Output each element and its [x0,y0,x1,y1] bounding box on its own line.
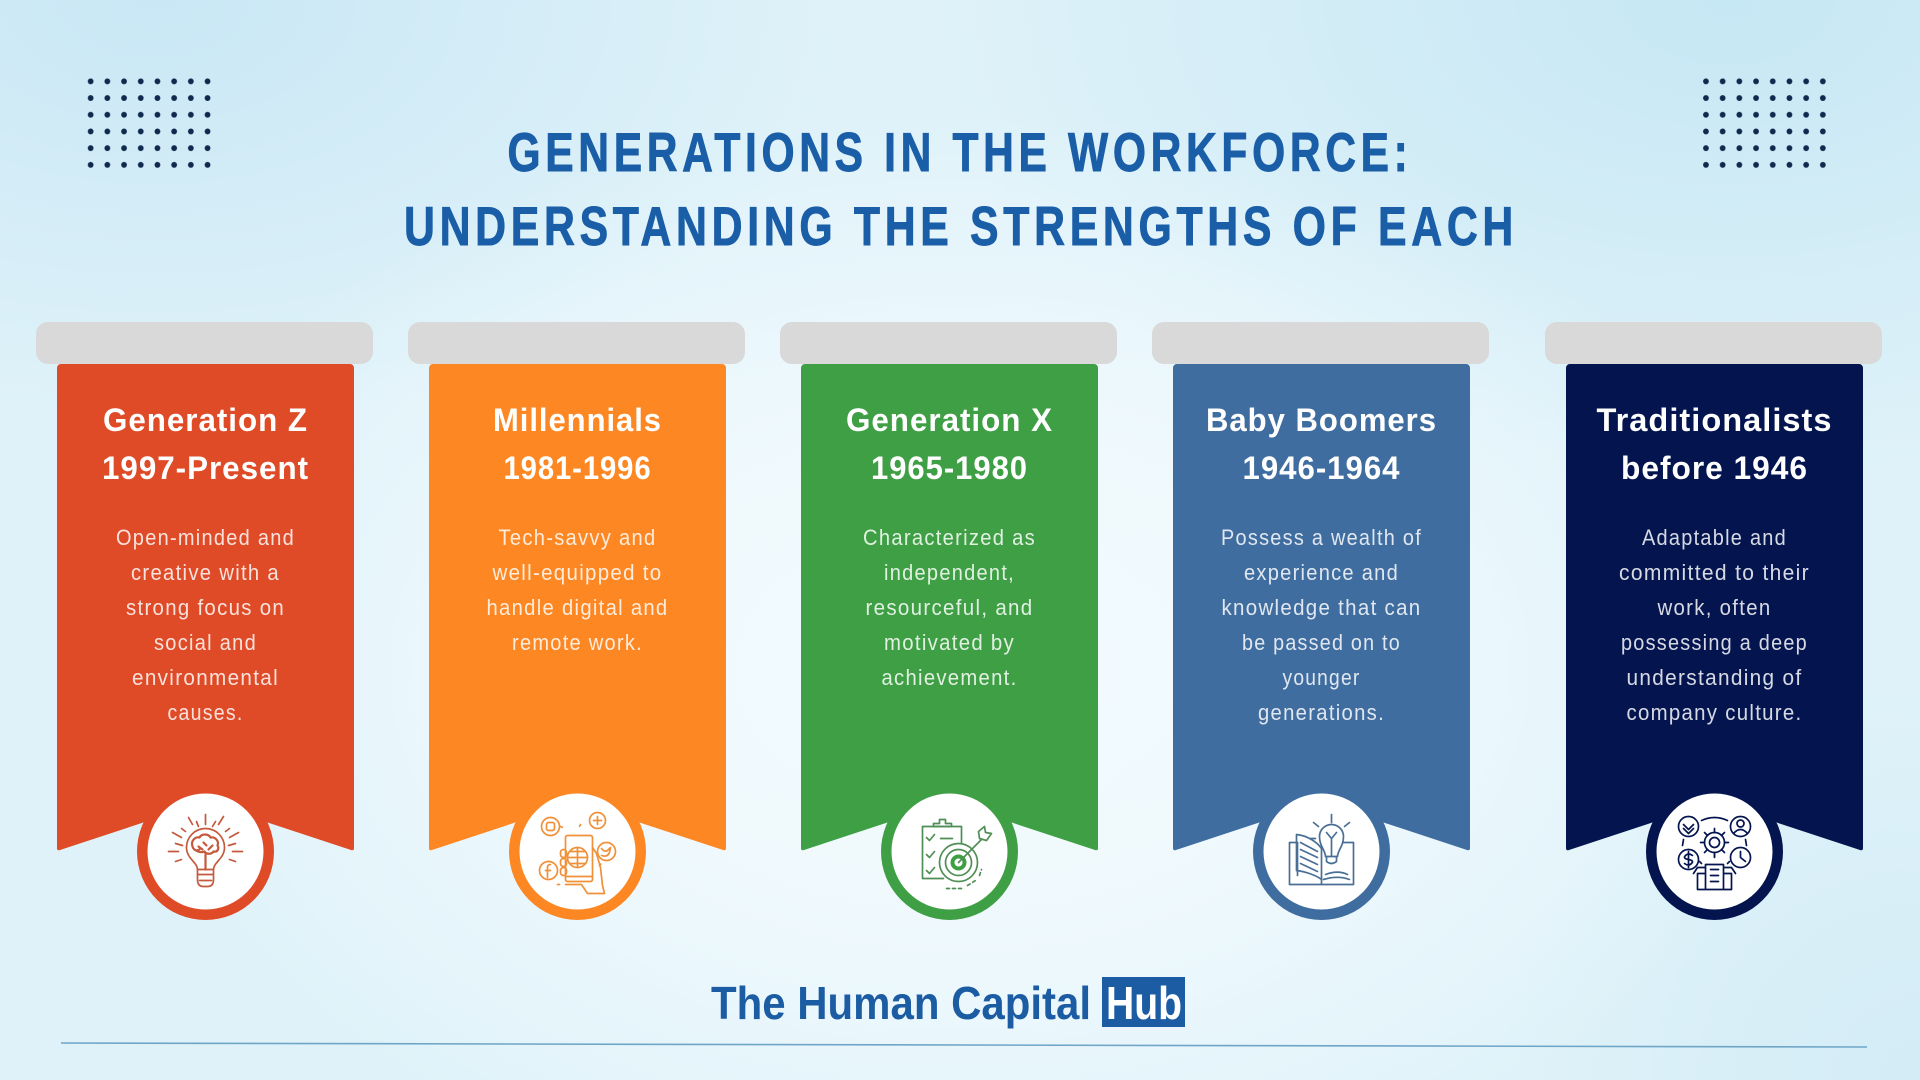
heading [493,402,662,486]
logo text: The Human Capital [711,977,1091,1029]
panel: Millennials [408,322,745,920]
heading: 1997-Present [102,450,309,486]
description: knowledge that can [1222,595,1422,620]
icon: company culture cycle [1678,816,1750,890]
description: company culture. [1626,700,1802,725]
icon circle [148,794,264,910]
panel: Traditionalists [1545,322,1882,920]
heading: Generation X [846,402,1053,438]
ribbon [1566,364,1863,850]
icon circle [1264,794,1380,910]
description: younger [1282,665,1360,690]
hanger bar [408,322,745,364]
title: GENERATIONS IN THE WORKFORCE: [508,121,1412,183]
heading [1596,402,1832,486]
description: be passed on to [1242,630,1401,655]
description: handle digital and [486,595,668,620]
icon circle [520,794,636,910]
icon: clipboard and target [922,820,992,888]
description: motivated by [884,630,1015,655]
icon: light bulb with brain [168,814,242,886]
panel: Generation X [780,322,1117,920]
description: work, often [1657,595,1772,620]
icon badge [509,783,646,920]
title [404,121,1518,257]
description: Possess a wealth of [1221,525,1422,550]
description: remote work. [512,630,643,655]
heading: before 1946 [1621,450,1808,486]
heading [846,402,1053,486]
description: experience and [1244,560,1399,585]
icon badge [881,783,1018,920]
description: well-equipped to [492,560,662,585]
logo: The Human Capital Hub [711,977,1185,1029]
description: generations. [1258,700,1385,725]
description: creative with a [131,560,280,585]
heading: Baby Boomers [1206,402,1437,438]
heading: Traditionalists [1596,402,1832,438]
description: strong focus on [126,595,285,620]
description [486,525,668,655]
ribbon [1173,364,1470,850]
hanger bar [1545,322,1882,364]
description [1619,525,1810,725]
icon: open book with light bulb [1290,814,1354,884]
hanger bar [1152,322,1489,364]
icon badge [137,783,274,920]
heading: Generation Z [103,402,308,438]
panel: Generation Z [36,322,373,920]
decoration: dot grid top right [1698,73,1831,173]
description: independent, [884,560,1015,585]
panel: Baby Boomers [1152,322,1489,920]
logo box [1102,977,1185,1027]
icon badge [1253,783,1390,920]
heading [1206,402,1437,486]
heading: 1981-1996 [504,450,652,486]
decoration: dot grid top left [82,73,216,173]
description: environmental [132,665,279,690]
description: committed to their [1619,560,1810,585]
description: Characterized as [863,525,1036,550]
hanger bar [780,322,1117,364]
ribbon [801,364,1098,850]
ribbon [57,364,354,850]
description [116,525,295,725]
description: Tech-savvy and [498,525,656,550]
description: possessing a deep [1621,630,1808,655]
heading: Millennials [493,402,662,438]
ribbon [429,364,726,850]
logo box text: Hub [1106,977,1182,1029]
title: UNDERSTANDING THE STRENGTHS OF EACH [404,195,1518,257]
description: achievement. [882,665,1018,690]
icon circle [1656,794,1772,910]
description: Adaptable and [1642,525,1787,550]
description: resourceful, and [866,595,1034,620]
description: Open-minded and [116,525,295,550]
icon circle [892,794,1008,910]
heading: 1946-1964 [1242,450,1400,486]
description [1221,525,1422,725]
description: social and [154,630,257,655]
hanger bar [36,322,373,364]
heading [102,402,309,486]
description: causes. [168,700,244,725]
icon: phone with social media [540,812,616,894]
icon badge [1646,783,1783,920]
heading: 1965-1980 [871,450,1028,486]
description [863,525,1036,690]
description: understanding of [1626,665,1802,690]
